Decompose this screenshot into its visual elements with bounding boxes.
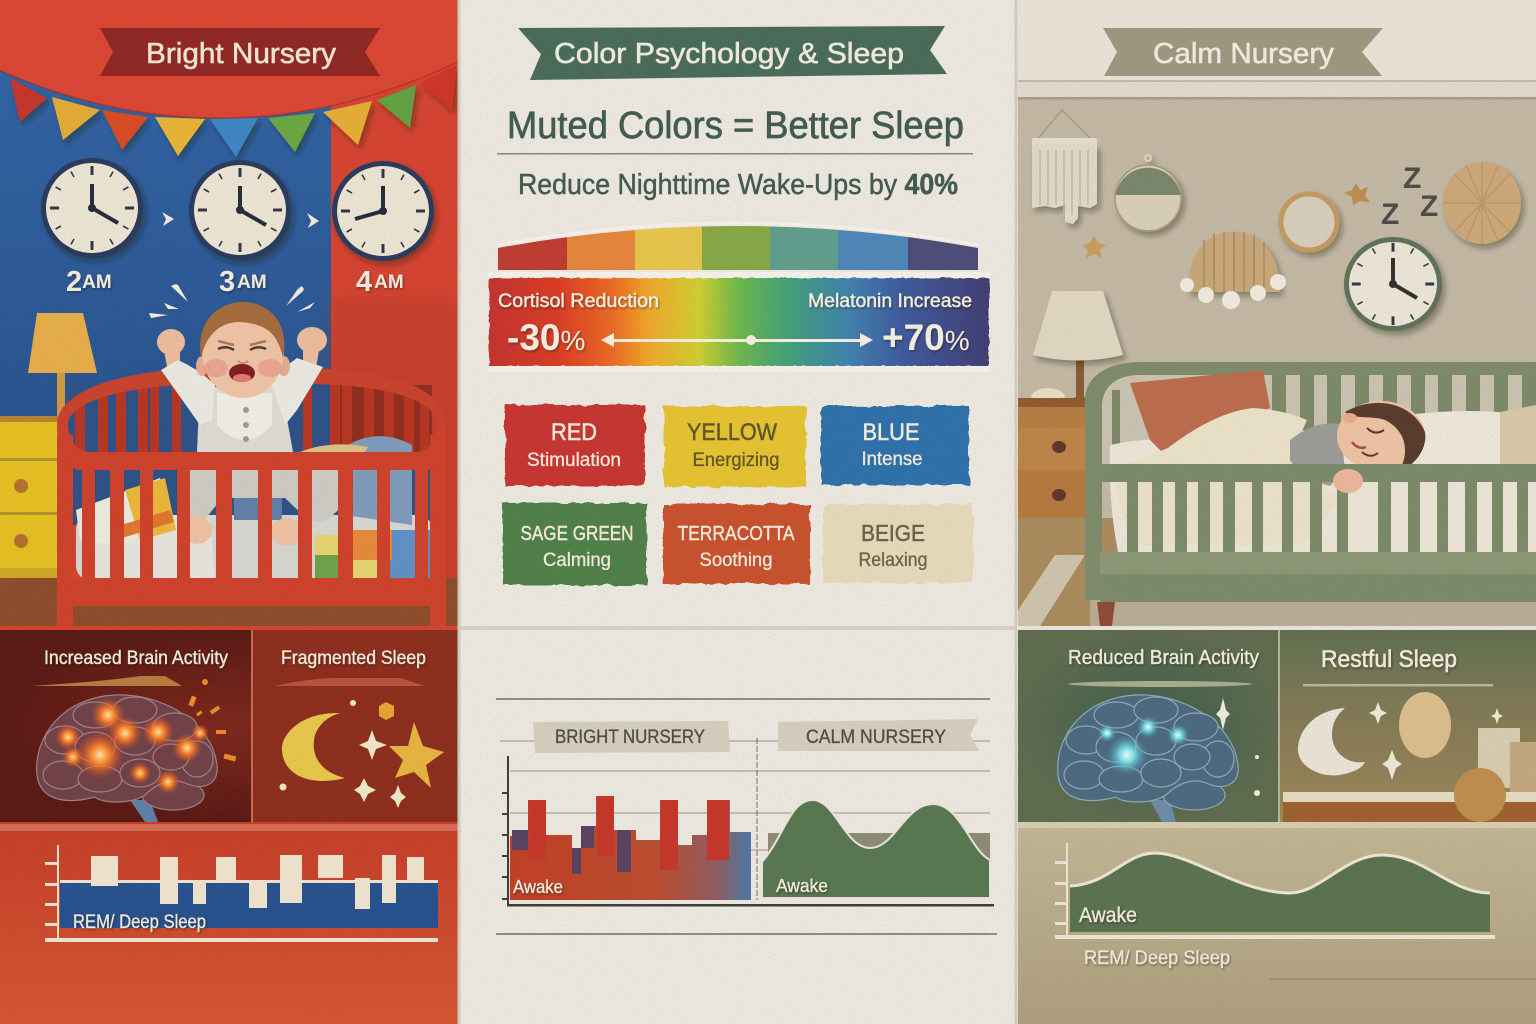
cheek left <box>204 359 228 377</box>
icon: sparkles <box>1369 702 1503 780</box>
time labels: 3 <box>219 266 235 298</box>
small dish <box>1031 388 1065 408</box>
tape label: bright: BRIGHT NURSERY <box>555 727 705 748</box>
ear right <box>278 356 290 376</box>
panel: bright nursery <box>0 0 460 1024</box>
gradient band: -30% <box>507 317 585 358</box>
valance edge <box>0 61 460 118</box>
macrame wall hanging <box>1032 110 1097 224</box>
arm right <box>270 358 323 425</box>
seam band <box>0 824 458 831</box>
swatch: terracotta: Soothing <box>700 550 772 571</box>
icon: sparkles <box>280 700 406 808</box>
swatch: blue: BLUE <box>862 419 920 446</box>
divider <box>756 738 758 900</box>
ear <box>1343 413 1357 423</box>
forearm right <box>303 345 320 368</box>
clock: calm <box>1344 237 1442 331</box>
swatch: beige <box>823 504 973 583</box>
chart: calm sleep <box>1055 843 1495 939</box>
red bars <box>529 796 729 870</box>
bunting flags <box>10 65 457 157</box>
lamp <box>1033 291 1123 407</box>
ring decoration <box>1281 194 1337 250</box>
time labels: AM <box>82 272 112 293</box>
torso <box>197 380 293 452</box>
woven fan <box>1443 162 1521 244</box>
head <box>202 306 284 398</box>
purple bars <box>512 826 631 874</box>
swatch: red: RED <box>551 419 597 446</box>
time labels: 2 <box>66 266 82 298</box>
ear left <box>196 356 208 376</box>
valance <box>0 0 460 119</box>
hoop decoration <box>1115 155 1181 231</box>
icon: active brain <box>37 679 236 822</box>
dresser <box>1018 398 1088 556</box>
gradient band <box>488 272 990 372</box>
blue wall <box>0 60 331 460</box>
swatch: blue <box>821 406 969 485</box>
time labels: 4 <box>356 266 372 298</box>
small hexagon <box>379 702 394 720</box>
eyes <box>218 347 266 350</box>
gradient band: Cortisol Reduction <box>498 291 659 312</box>
lower right area <box>1018 822 1536 1024</box>
blanket <box>1112 408 1340 545</box>
zzz <box>1381 162 1438 231</box>
colour arc <box>498 226 978 270</box>
fragmented sleep background <box>253 630 458 822</box>
swatch: sage green: Calming <box>543 550 611 571</box>
banner: calm nursery <box>1103 28 1383 76</box>
chart rules <box>496 699 997 934</box>
foot right <box>271 518 303 546</box>
mattress <box>1110 439 1536 552</box>
red wall shading <box>331 300 458 600</box>
swatch: yellow: Energizing <box>692 450 780 471</box>
floor and skirting <box>1283 792 1536 822</box>
banner: color psychology: Color Psychology & Sleep <box>554 38 904 70</box>
time labels: AM <box>237 272 267 293</box>
divider <box>251 630 253 822</box>
chart: calm sleep: Awake <box>1079 904 1137 927</box>
star <box>1082 236 1106 258</box>
swatch: yellow <box>664 406 806 487</box>
divider <box>1278 630 1280 822</box>
cheek right <box>258 359 282 377</box>
cork ball <box>1454 768 1506 822</box>
closed eyes <box>1362 428 1384 456</box>
swatch: yellow: YELLOW <box>687 419 777 446</box>
arrow <box>307 213 319 228</box>
calm hills <box>762 800 990 898</box>
crib leg <box>1097 602 1115 626</box>
rule <box>497 153 973 154</box>
fist left <box>157 329 185 355</box>
panel: colour psychology <box>458 0 1020 1024</box>
swatch: red <box>505 405 645 486</box>
chart: bright sleep: REM/ Deep Sleep <box>73 912 206 933</box>
lower right: dark panel <box>1018 630 1280 822</box>
crib front <box>1100 464 1536 602</box>
legs <box>188 468 345 523</box>
zzz: Z <box>1381 198 1399 231</box>
clock: 4 AM <box>332 161 434 261</box>
seam band <box>1018 822 1536 828</box>
arrow <box>162 212 174 226</box>
white pillows <box>1410 405 1536 466</box>
hair <box>200 302 284 358</box>
swatch: sage green: SAGE GREEN <box>520 523 634 545</box>
clock: 3 AM <box>189 160 291 260</box>
lamp <box>28 313 97 425</box>
gradient band: +70% <box>882 317 970 358</box>
icon: crescent moon <box>282 713 345 781</box>
bright area <box>510 796 751 900</box>
clock: 2 AM <box>41 158 143 258</box>
time labels <box>66 266 404 298</box>
sleep comparison chart: Awake <box>776 876 828 896</box>
hair <box>1345 403 1425 470</box>
wall <box>1018 98 1536 518</box>
double arrow <box>601 333 873 347</box>
swatch: terracotta <box>663 504 810 584</box>
restful sleep background <box>1280 630 1536 822</box>
title smudge <box>30 676 182 686</box>
title smudge <box>275 678 425 686</box>
swatch: beige: BEIGE <box>861 520 925 546</box>
pillows and blanket <box>76 436 412 545</box>
buttons <box>243 407 249 442</box>
woven half basket <box>1180 232 1286 309</box>
icon: moon disc <box>1399 692 1451 758</box>
sleeping baby <box>1290 401 1425 486</box>
crib back rail and slats <box>57 368 446 525</box>
bib <box>217 393 272 440</box>
calm background <box>768 833 990 863</box>
forearm left <box>163 345 180 372</box>
swatch: terracotta: TERRACOTTA <box>678 523 795 545</box>
crying baby <box>157 302 345 546</box>
cry marks <box>149 284 315 318</box>
foot left <box>182 516 212 544</box>
headline: Muted Colors = Better Sleep <box>507 105 964 147</box>
sleep comparison chart <box>500 719 994 906</box>
mouth <box>1352 442 1366 448</box>
swatch: red: Stimulation <box>527 450 621 471</box>
grid lines <box>500 741 990 850</box>
seam <box>460 626 1016 630</box>
swatch: blue: Intense <box>862 449 922 470</box>
icon: star <box>389 722 444 788</box>
subheading: Reduce Nighttime Wake-Ups by 40% <box>518 169 958 201</box>
title smudge <box>1068 681 1252 687</box>
tape label: bright <box>533 721 730 753</box>
panel: calm nursery <box>1018 0 1536 1024</box>
zzz: Z <box>1420 190 1438 223</box>
panel edges <box>459 0 1016 1024</box>
mattress <box>76 514 432 580</box>
arm left <box>161 360 215 425</box>
lower left panel: dark background <box>0 630 458 822</box>
icon: white crescent <box>1298 708 1365 775</box>
fragmented sleep title: Fragmented Sleep <box>281 648 426 669</box>
tape label: calm <box>778 719 979 751</box>
colour arc edge <box>498 223 978 245</box>
restful sleep title: Restful Sleep <box>1321 646 1457 673</box>
title rule <box>1303 684 1493 686</box>
zzz: Z <box>1403 162 1421 195</box>
baby hand <box>1333 469 1363 493</box>
mouth <box>229 364 255 382</box>
swatch: sage green <box>503 503 647 585</box>
floor <box>0 578 458 626</box>
brows <box>218 341 266 345</box>
rem label: REM/ Deep Sleep <box>1084 948 1230 969</box>
sleep comparison chart: Awake <box>513 877 563 897</box>
gradient band: Melatonin Increase <box>808 291 972 312</box>
tape label: calm: CALM NURSERY <box>806 727 946 748</box>
lower red area <box>0 822 458 1024</box>
chart: bright sleep <box>45 845 438 942</box>
terracotta pillow <box>1130 370 1270 458</box>
reduced brain title: Reduced Brain Activity <box>1068 647 1259 669</box>
crib front <box>57 425 446 626</box>
fist right <box>297 327 327 353</box>
faint rule <box>1270 978 1536 980</box>
banner: bright nursery <box>100 28 380 76</box>
books <box>1478 728 1536 792</box>
arm <box>1290 423 1345 486</box>
brain title: Increased Brain Activity <box>44 648 228 669</box>
banner: color psychology <box>518 26 947 80</box>
crib back <box>1085 362 1536 600</box>
shin shade <box>234 498 282 520</box>
star <box>1344 183 1370 205</box>
banner: calm nursery: Calm Nursery <box>1153 38 1335 70</box>
moulding <box>1018 80 1536 100</box>
swatch: beige: Relaxing <box>858 550 928 571</box>
banner: bright nursery: Bright Nursery <box>146 38 337 70</box>
icon: calm brain <box>1058 695 1260 822</box>
head <box>1337 401 1425 471</box>
dresser <box>0 416 60 578</box>
nose <box>238 361 248 363</box>
tongue <box>233 374 251 382</box>
time labels: AM <box>374 272 404 293</box>
floor <box>1018 518 1536 626</box>
axes <box>502 756 994 906</box>
